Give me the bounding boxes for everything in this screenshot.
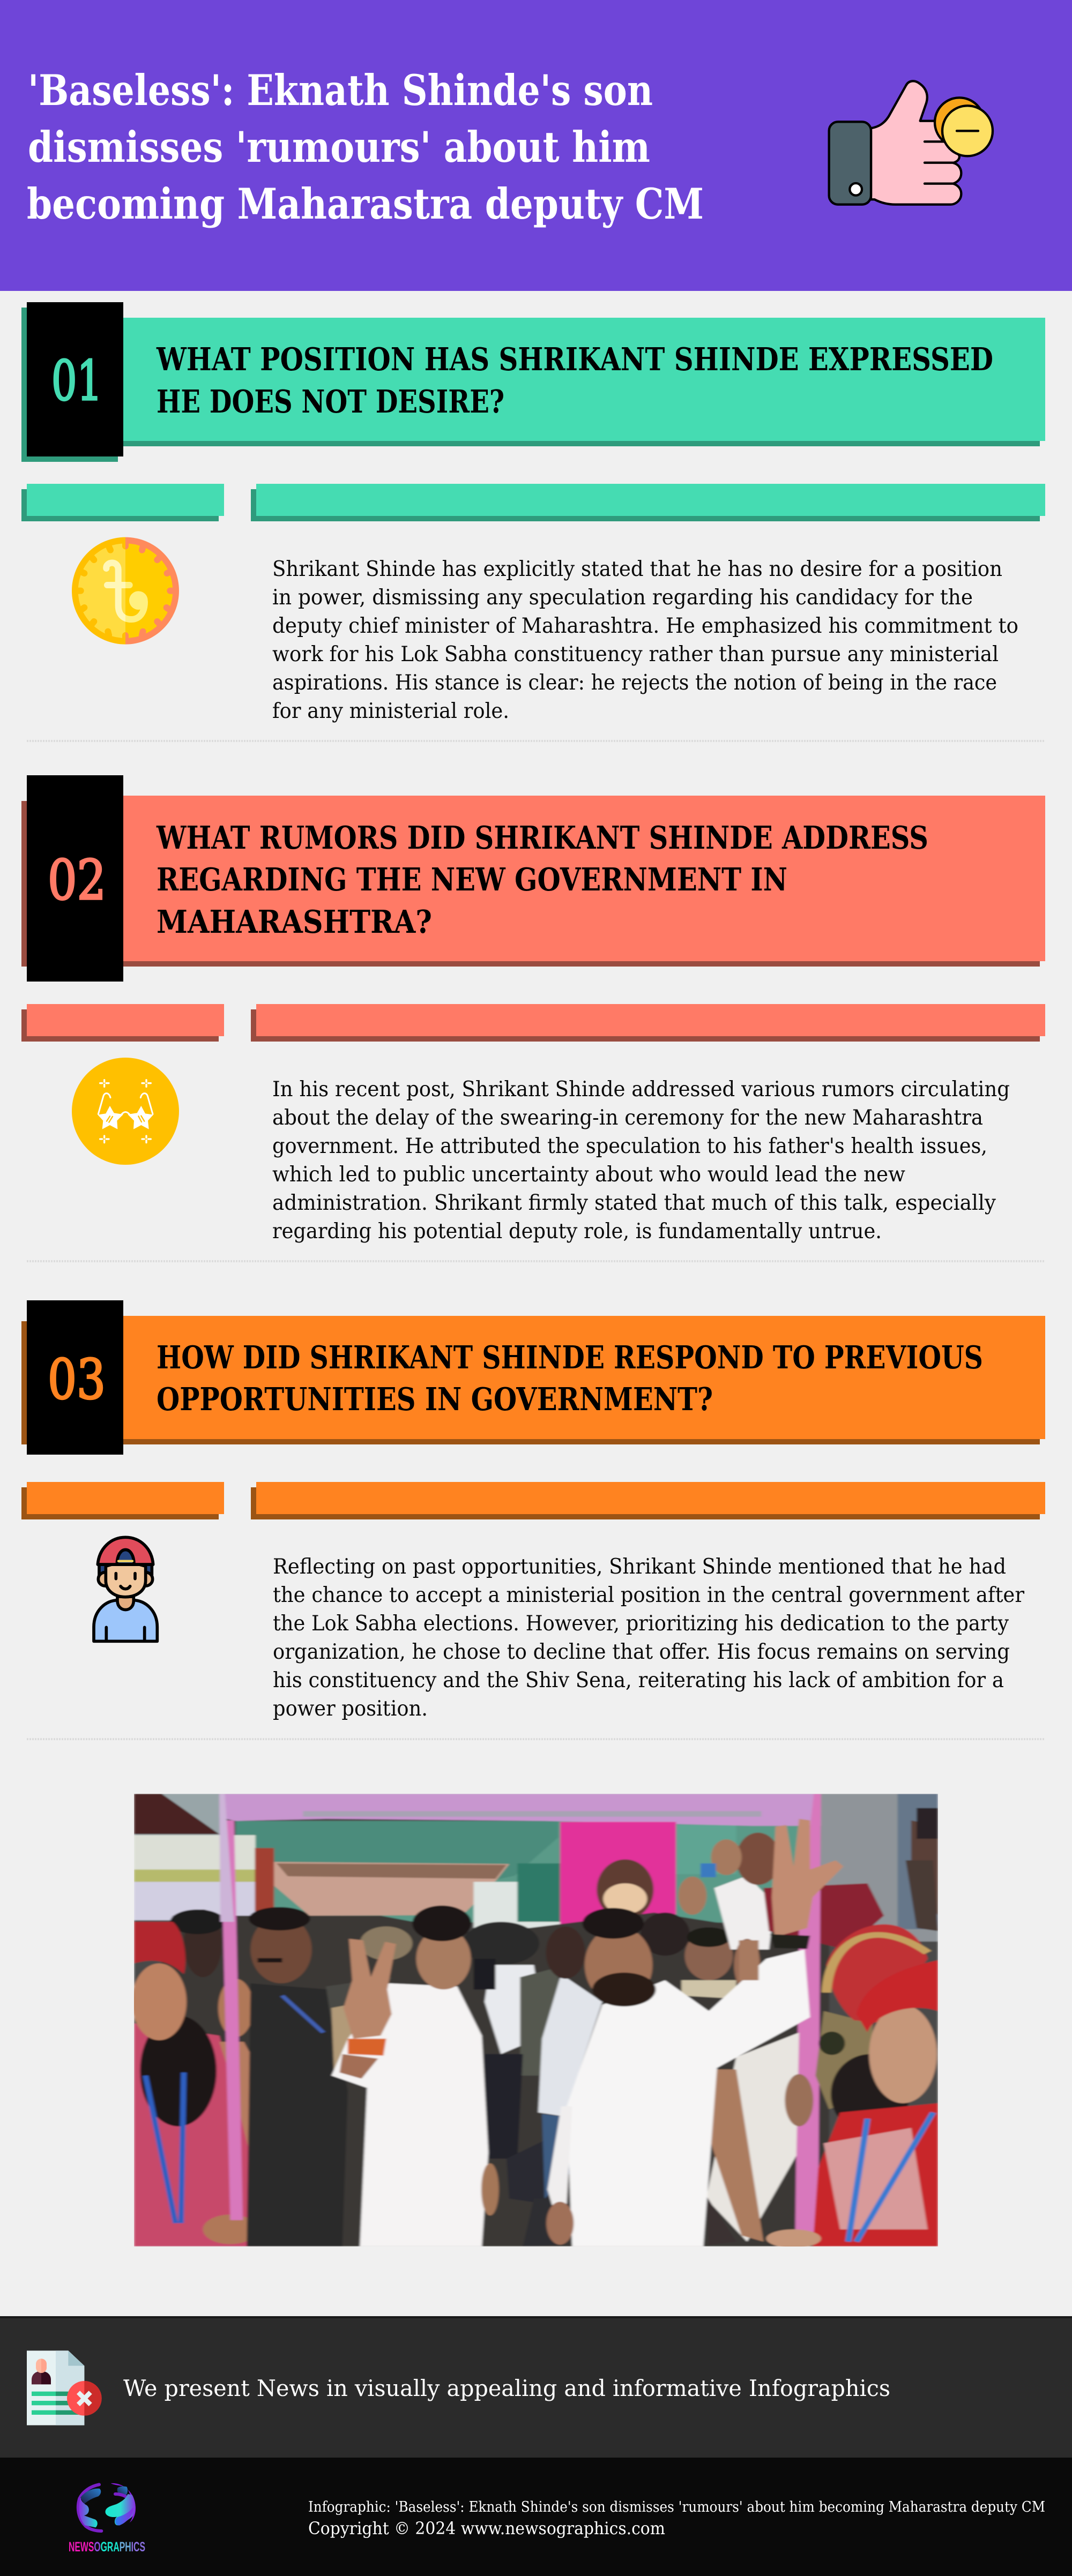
- text block 03: the chance to accept a ministerial position in the central government after: [273, 1583, 1024, 1607]
- text block 01: Shrikant Shinde has explicitly stated that he has no desire for a position: [272, 557, 1002, 581]
- panel: section 03: [21, 1300, 1045, 1721]
- icon: boy with cap: [94, 1537, 157, 1641]
- icon: star glasses: [72, 1058, 179, 1165]
- title: [27, 65, 704, 229]
- icon: thumbs up with minus coin: [829, 81, 993, 205]
- heading bar 03: [21, 1300, 1045, 1455]
- photo: Shrikant and Eknath Shinde waving in a pink selfie frame: [132, 1794, 938, 2248]
- title: 'Baseless': Eknath Shinde's son: [28, 65, 653, 115]
- text block 02: which led to public uncertainty about who would lead the new: [272, 1163, 905, 1187]
- sub bars 01: [21, 484, 1045, 521]
- text block 01: for any ministerial role.: [272, 699, 509, 723]
- white shirt man behind: [706, 2033, 799, 2242]
- woman left: [134, 2023, 250, 2246]
- text block 01: [272, 557, 1018, 723]
- tagline text: We present News in visually appealing and informative Infographics: [123, 2375, 890, 2401]
- panel: tagline band: [0, 2316, 1072, 2458]
- crowd mass: [134, 1913, 829, 2246]
- text block 03: [273, 1555, 1024, 1721]
- text block 03: power position.: [273, 1697, 428, 1721]
- text block 02: about the delay of the swearing-in ceremony for the new Maharashtra: [272, 1106, 983, 1130]
- heading bar 02: 02: [48, 849, 106, 912]
- text block 01: work for his Lok Sabha constituency rather than pursue any ministerial: [272, 642, 999, 667]
- sub bars 03: [21, 1482, 1045, 1519]
- Shrikant in white kurta: [331, 1983, 488, 2246]
- text block 02: regarding his potential deputy role, is fundamentally untrue.: [272, 1219, 882, 1244]
- heading bar 01: 01: [51, 349, 102, 413]
- panel: section 01: [21, 302, 1045, 723]
- panel: footer: [0, 2458, 1072, 2576]
- heading bar 03: 03: [48, 1348, 106, 1412]
- Eknath Shinde in white shirt: [567, 1950, 810, 2246]
- text block 03: Reflecting on past opportunities, Shrikant Shinde mentioned that he had: [273, 1555, 1006, 1579]
- heading bar 02: REGARDING THE NEW GOVERNMENT IN: [157, 861, 787, 898]
- title: dismisses 'rumours' about him: [28, 122, 650, 172]
- heading bar 02: [21, 775, 1045, 982]
- man in black: [247, 1983, 348, 2246]
- footer credit text: [308, 2499, 1045, 2538]
- heading bar 02: WHAT RUMORS DID SHRIKANT SHINDE ADDRESS: [156, 819, 928, 856]
- text block 02: [272, 1077, 1010, 1244]
- icon: rejected document: [27, 2350, 102, 2425]
- heading bar 01: [21, 302, 1045, 462]
- icon: taka coin: [72, 537, 179, 645]
- panel: section 02: [21, 775, 1045, 1244]
- heading bar 03: OPPORTUNITIES IN GOVERNMENT?: [157, 1381, 713, 1418]
- sub bars 02: [21, 1004, 1045, 1042]
- title: becoming Maharastra deputy CM: [27, 179, 704, 229]
- text block 02: In his recent post, Shrikant Shinde addressed various rumors circulating: [272, 1077, 1010, 1102]
- panel: header: [0, 0, 1072, 291]
- text block 03: the Lok Sabha elections. However, prioritizing his dedication to the party: [273, 1612, 1009, 1636]
- heading bar 02: MAHARASHTRA?: [157, 903, 432, 940]
- text block 03: his constituency and the Shiv Sena, reiterating his lack of ambition for a: [273, 1668, 1004, 1693]
- logo: Newsographics: NEWSOGRAPHICS: [69, 2540, 145, 2555]
- text block 02: government. He attributed the speculation to his father's health issues,: [272, 1134, 987, 1158]
- text block 01: aspirations. His stance is clear: he rejects the notion of being in the race: [272, 671, 997, 695]
- text block 01: in power, dismissing any speculation regarding his candidacy for the: [272, 586, 973, 610]
- footer credit text: Copyright © 2024 www.newsographics.com: [308, 2518, 665, 2538]
- pink frame posts: [220, 1821, 243, 2220]
- middle crowd: [485, 1965, 539, 2054]
- text block 03: organization, he chose to decline that offer. His focus remains on serving: [273, 1640, 1010, 1664]
- heading bar 01: HE DOES NOT DESIRE?: [157, 383, 504, 420]
- text block 02: administration. Shrikant firmly stated that much of this talk, especially: [272, 1191, 996, 1215]
- text block 01: deputy chief minister of Maharashtra. He emphasized his commitment to: [272, 614, 1018, 638]
- right side people: [815, 2011, 873, 2109]
- logo: Newsographics: [69, 2483, 145, 2555]
